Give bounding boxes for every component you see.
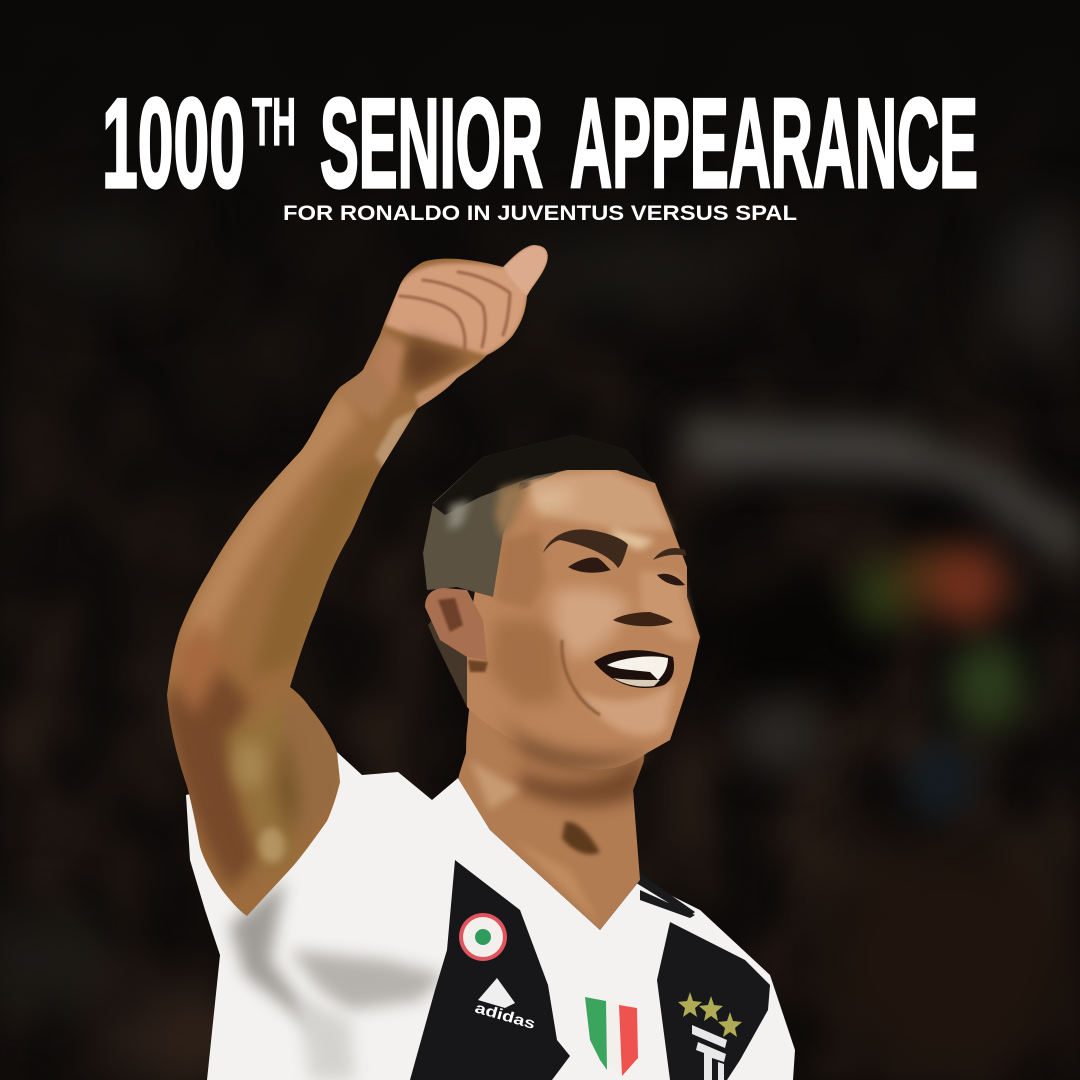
chin light — [580, 680, 675, 736]
title number: 1000 — [102, 72, 245, 214]
face — [467, 468, 700, 770]
nose — [613, 612, 673, 626]
raised arm and thumbs-up hand — [165, 245, 548, 916]
finger lines — [400, 272, 510, 352]
head — [423, 435, 700, 770]
neck — [458, 700, 645, 930]
forearm shading — [172, 385, 360, 680]
title: SENIOR — [320, 72, 543, 214]
nape hair — [428, 610, 475, 707]
wrist — [340, 330, 395, 420]
hand — [385, 263, 528, 355]
player — [165, 245, 795, 1080]
eyes — [568, 557, 611, 573]
jaw shadow — [500, 720, 650, 770]
cheek light — [550, 588, 630, 660]
hair — [423, 435, 655, 597]
title: TH — [252, 84, 296, 160]
forehead light — [525, 470, 672, 530]
thumb — [503, 245, 548, 296]
title — [102, 72, 978, 214]
left black stripe — [410, 860, 570, 1080]
teeth — [607, 656, 668, 680]
subtitle: FOR RONALDO IN JUVENTUS VERSUS SPAL — [283, 202, 797, 225]
ear — [425, 588, 487, 660]
mouth — [594, 650, 674, 688]
club crest — [692, 1025, 727, 1080]
right black stripe — [657, 922, 770, 1080]
three stars — [678, 992, 742, 1037]
sponsor logo: adidas — [473, 1000, 537, 1033]
jersey — [186, 752, 795, 1080]
sponsor logo — [473, 978, 537, 1033]
tricolour badge — [459, 913, 507, 961]
cheek crease — [562, 640, 600, 715]
brows — [543, 529, 628, 568]
sleeve folds — [230, 880, 445, 1080]
scudetto shield — [585, 997, 638, 1076]
collar stripes — [628, 868, 695, 918]
